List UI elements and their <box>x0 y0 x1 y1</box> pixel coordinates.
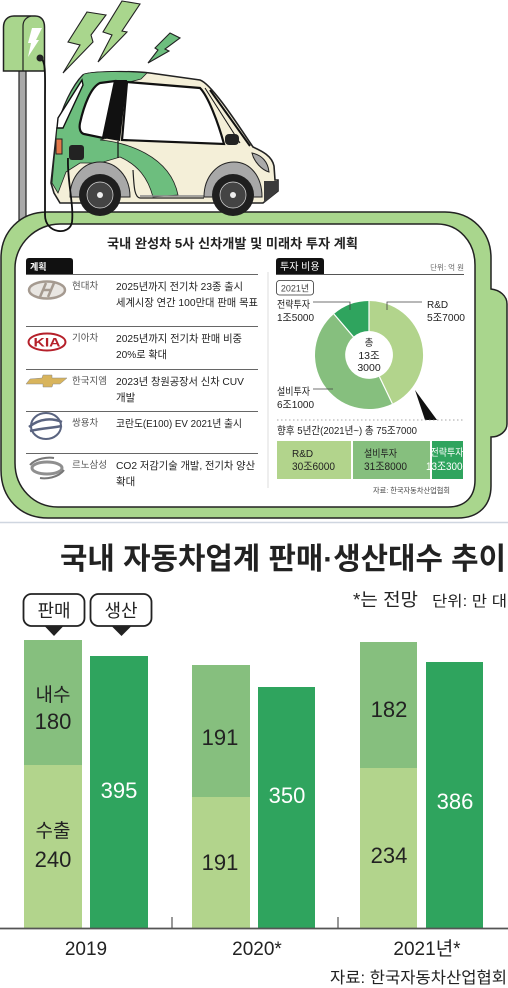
row: Hyundai: 현대차 <box>72 280 98 292</box>
row: SsangYong <box>29 413 242 439</box>
bars: 2019: 395 <box>101 778 137 803</box>
label: 2021: 2021년 <box>281 284 309 294</box>
row: Renault Samsung: 르노삼성 <box>72 460 107 471</box>
bars: 2019: 180 <box>35 709 71 734</box>
panel: investment cost <box>276 258 468 495</box>
axis labels <box>65 938 461 960</box>
text: five-year total: 향후 5년간(2021년~) 총 75조7000 <box>277 425 417 437</box>
note: forecast and unit: 단위: 만 대 <box>432 593 507 610</box>
row: GM Korea: 2023년 창원공장서 신차 CUV <box>116 376 244 388</box>
icon: charging cable <box>36 54 72 231</box>
stacked bar: 31조8000 <box>364 461 407 473</box>
row: Kia <box>28 332 242 361</box>
heading: sales and production: 국내 자동차업계 판매·생산대수 추이 <box>60 543 506 576</box>
donut chart: 13조 <box>358 350 380 362</box>
bars: 2020: 350 <box>269 783 305 808</box>
stacked bar: 설비투자 <box>364 448 397 460</box>
stacked bar: R&D <box>292 449 313 460</box>
bars: 2019: 240 <box>35 847 71 872</box>
panel: investment cost: 투자 비용 <box>280 261 320 273</box>
stacked bar: 13조3000 <box>426 461 468 473</box>
bars: 2019 <box>24 640 148 928</box>
donut labels: R&D <box>427 300 448 311</box>
row: GM Korea <box>26 375 244 404</box>
arrow: 5-year pointer <box>415 390 437 420</box>
legend: sales: 판매 <box>37 601 71 621</box>
axis labels: 2021년* <box>393 938 461 960</box>
row: Hyundai: 2025년까지 전기차 23종 출시 <box>116 281 243 293</box>
donut labels: 5조7000 <box>427 312 465 324</box>
axis labels: 2020* <box>232 939 282 960</box>
panel: plans table <box>26 258 268 488</box>
row: Hyundai: 세계시장 연간 100만대 판매 목표 <box>116 297 258 309</box>
donut chart: 3000 <box>357 362 381 374</box>
row: SsangYong: 쌍용차 <box>72 417 98 429</box>
row: Renault Samsung: CO2 저감기술 개발, 전기차 양산 <box>116 460 255 472</box>
row: GM Korea: 한국지엠 <box>72 375 107 387</box>
stacked bar: 전략투자 <box>430 447 464 459</box>
source: upper: 자료: 한국자동차산업협회 <box>373 485 450 495</box>
axis labels: 2019 <box>65 939 107 960</box>
donut labels: 6조1000 <box>277 399 314 411</box>
row: Kia: 2025년까지 전기차 판매 비중 <box>116 333 242 345</box>
icon: charging station <box>4 16 44 225</box>
note: forecast and unit <box>353 590 507 610</box>
donut labels: 1조5000 <box>277 312 314 324</box>
divider <box>0 522 508 524</box>
legend: production <box>90 594 152 636</box>
panel: plans table: 계획 <box>30 261 47 272</box>
donut chart <box>315 301 423 409</box>
row: Renault Samsung: 확대 <box>116 475 135 488</box>
row: Renault Samsung <box>30 458 255 488</box>
bars: 2021: 234 <box>371 843 407 868</box>
panel: investment cost: 단위: 억 원 <box>430 262 464 272</box>
donut labels: 설비투자 <box>277 386 310 398</box>
bars: 2020 <box>192 665 315 928</box>
bars: 2021 <box>360 642 483 928</box>
donut labels: 전략투자 <box>277 299 310 311</box>
stacked bar: 30조6000 <box>292 461 335 473</box>
donut labels <box>277 299 465 411</box>
note: forecast and unit: *는 전망 <box>353 590 418 610</box>
icon: electric car <box>51 72 278 216</box>
legend: production: 생산 <box>104 601 138 621</box>
source: lower: 자료: 한국자동차산업협회 <box>330 969 507 987</box>
bar chart <box>0 640 508 960</box>
row: Kia: KIA <box>34 336 61 350</box>
row: GM Korea: 개발 <box>116 392 136 404</box>
stacked bar <box>277 441 468 479</box>
bars: 2020: 191 <box>202 850 238 875</box>
row: Hyundai <box>29 280 258 309</box>
icon: lightning bolts <box>63 1 180 73</box>
row: Kia: 20%로 확대 <box>116 348 167 361</box>
bars: 2020: 191 <box>202 725 238 750</box>
panel: green frame <box>1 212 507 518</box>
legend: sales <box>24 594 84 636</box>
bars: 2019: 내수 <box>36 684 70 706</box>
heading: investment plan: 국내 완성차 5사 신차개발 및 미래차 투자 계획 <box>107 236 358 251</box>
row: Kia: 기아차 <box>72 332 98 344</box>
bars: 2021: 386 <box>437 789 473 814</box>
row: SsangYong: 코란도(E100) EV 2021년 출시 <box>116 418 242 430</box>
bars: 2021: 182 <box>371 697 407 722</box>
label: 2021 <box>276 280 314 295</box>
bars: 2019: 수출 <box>36 820 70 842</box>
donut chart: 총 <box>365 338 374 349</box>
